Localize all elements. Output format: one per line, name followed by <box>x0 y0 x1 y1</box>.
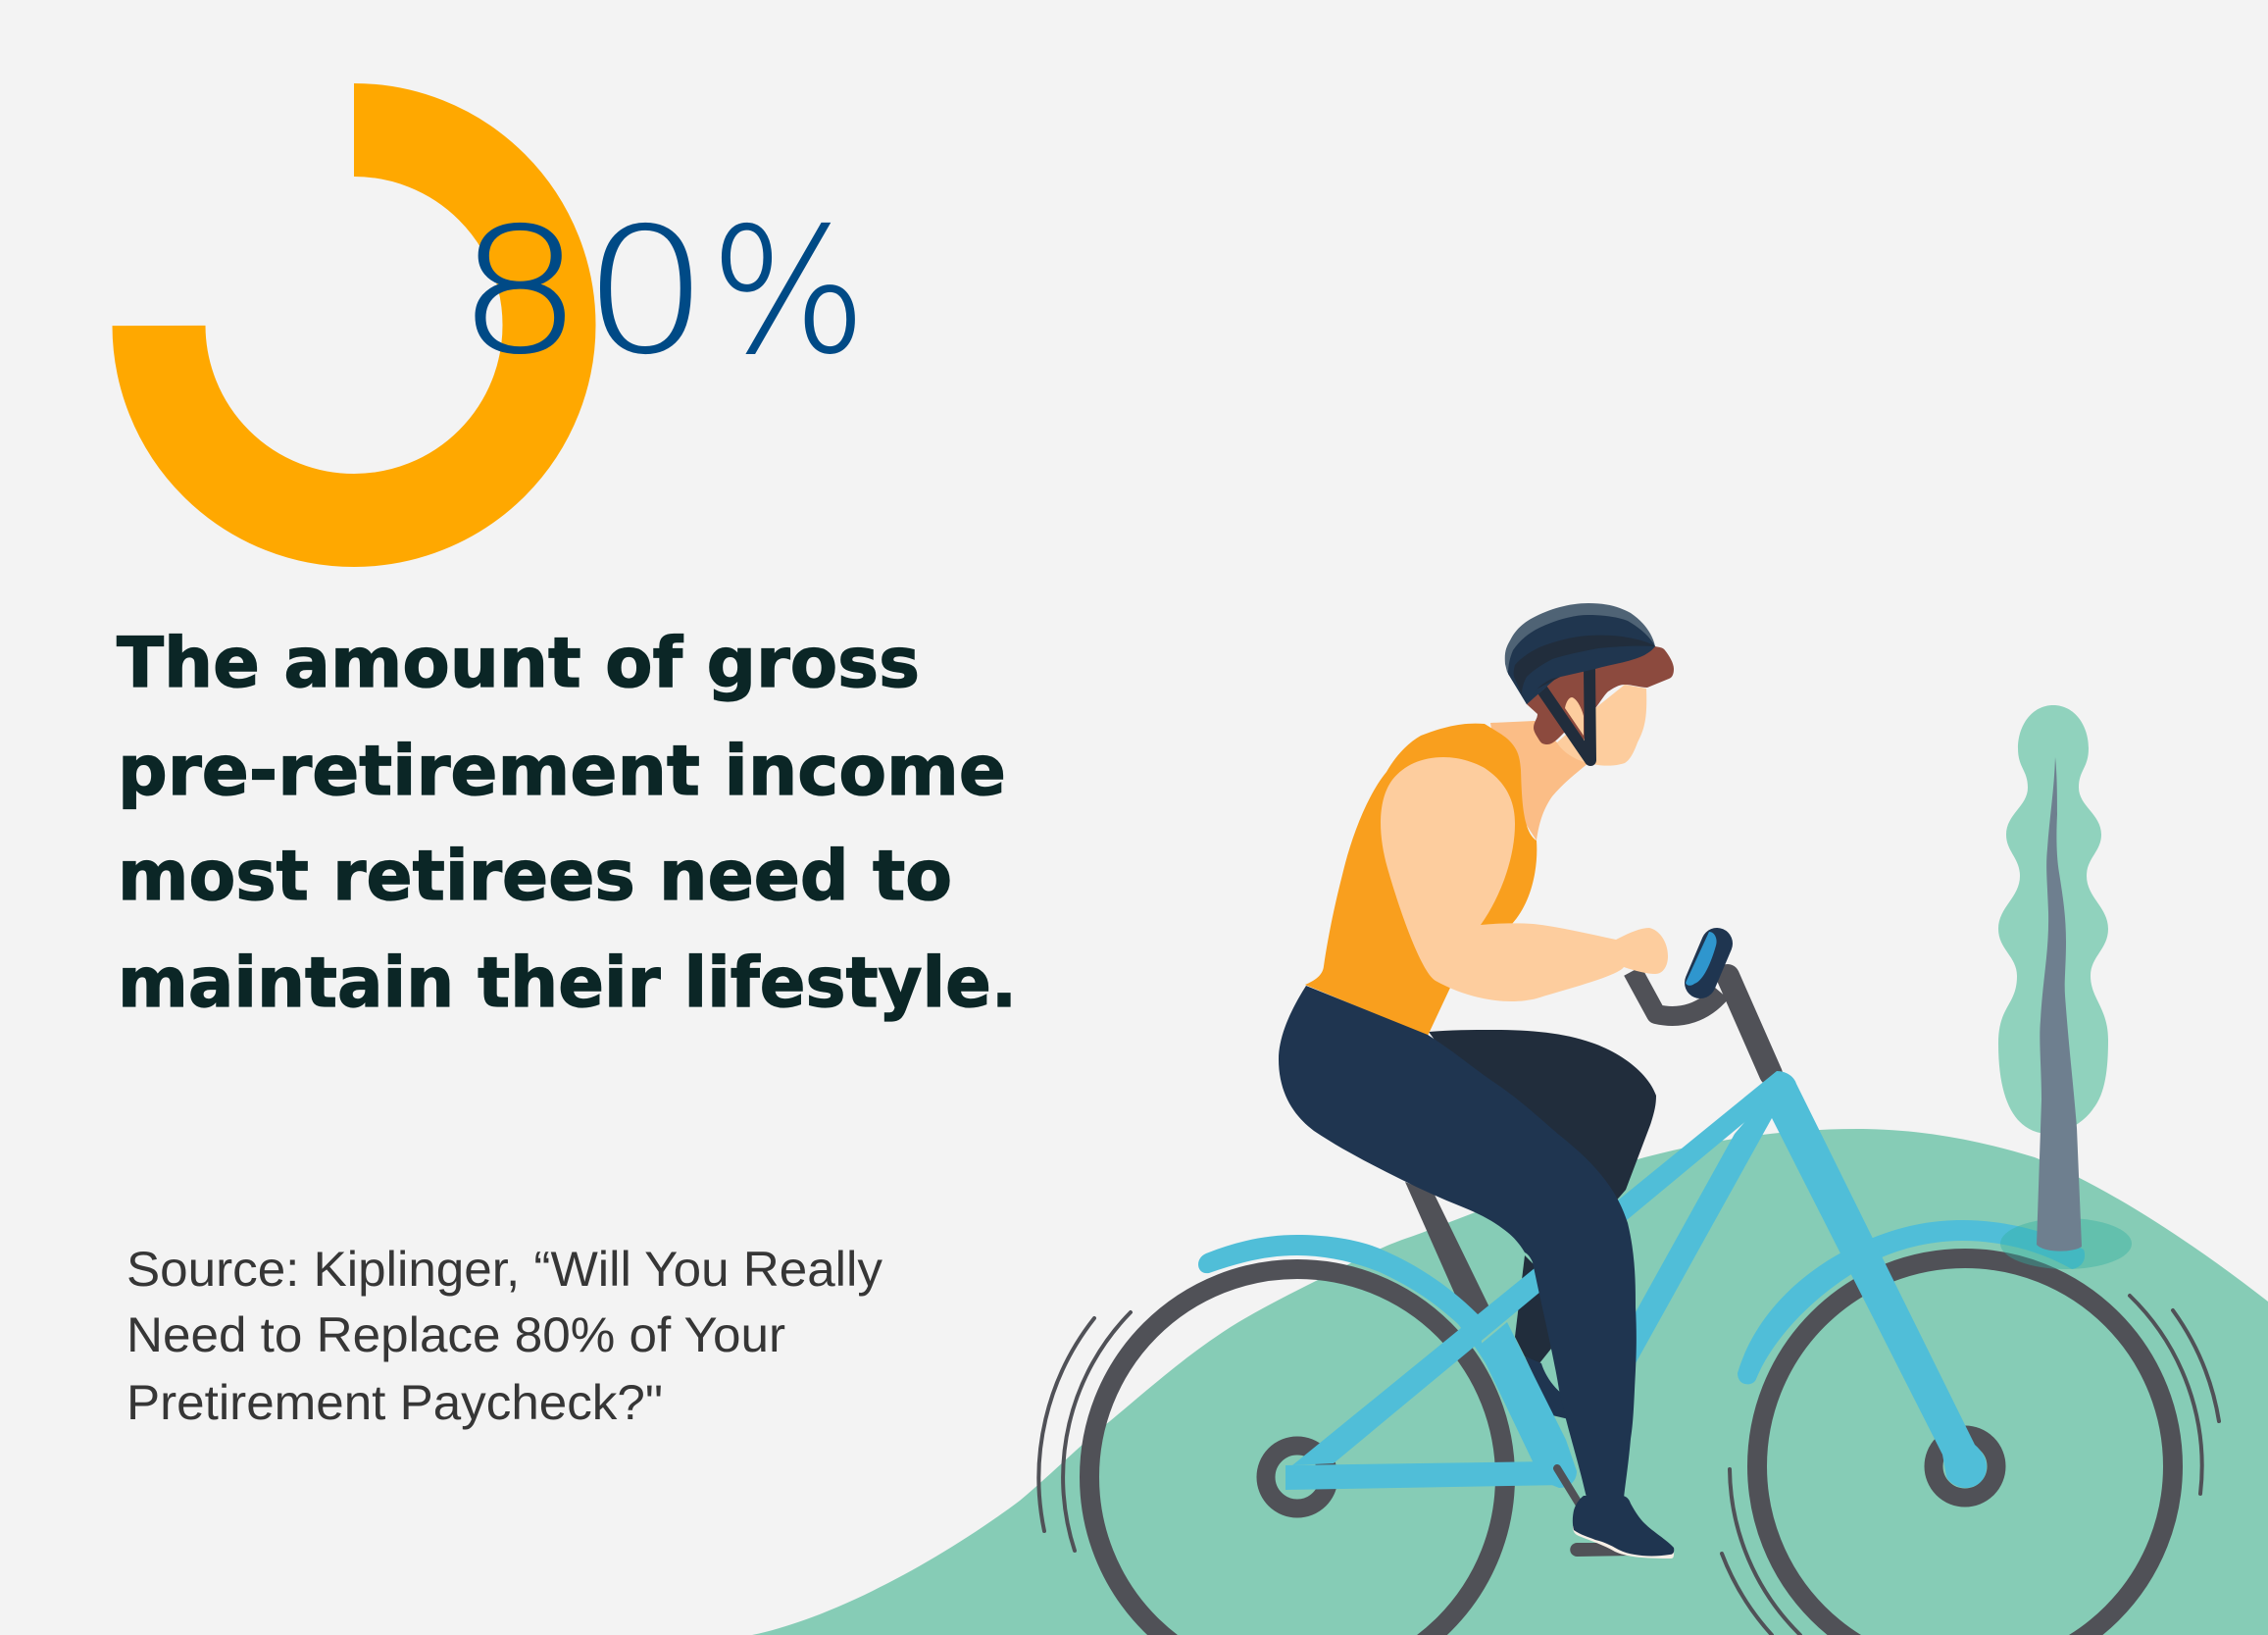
seat post <box>1405 1182 1490 1319</box>
source citation <box>126 1242 882 1430</box>
source citation: Source: Kiplinger, “Will You Really <box>126 1242 882 1297</box>
ear <box>1565 697 1584 736</box>
motion lines <box>1038 1296 2219 1635</box>
calf shadow piece <box>1525 1356 1569 1419</box>
rear wheel <box>1089 1269 1505 1635</box>
handlebar grip <box>1686 932 1717 986</box>
arm <box>1381 757 1668 1001</box>
source citation: Pretirement Paycheck?" <box>126 1375 663 1430</box>
heading text: The amount of gross <box>117 623 920 703</box>
shoe sole <box>1573 1526 1674 1558</box>
bike frame <box>1198 1071 2085 1490</box>
source citation: Need to Replace 80% of Your <box>126 1307 785 1362</box>
main leg <box>1279 986 1637 1498</box>
handlebar <box>1633 971 1771 1074</box>
heading text: pre-retirement income <box>118 731 1006 811</box>
big number 80%: 80 <box>457 191 709 392</box>
neck <box>1490 721 1588 841</box>
far thigh <box>1429 1030 1656 1204</box>
head and face <box>1557 685 1646 766</box>
shoe <box>1573 1496 1674 1556</box>
big number 80% <box>457 191 867 392</box>
heading text <box>117 623 1017 1023</box>
hair <box>1527 646 1674 744</box>
crank arm <box>1557 1468 1581 1507</box>
illustration: tree canopy <box>1998 705 2108 1134</box>
heading text: most retirees need to <box>118 836 952 916</box>
big number 80%: % <box>710 191 867 392</box>
pedal <box>1570 1543 1633 1557</box>
helmet straps <box>1541 669 1590 760</box>
helmet <box>1505 603 1655 704</box>
heading text: maintain their lifestyle. <box>118 943 1017 1023</box>
cyclist <box>1279 603 1674 1558</box>
tree trunk <box>2037 757 2082 1252</box>
illustration: hill <box>752 1129 2268 1635</box>
far lower leg <box>1515 1255 1551 1363</box>
tree shadow <box>2000 1218 2132 1269</box>
front wheel <box>1757 1258 2173 1635</box>
donut chart: 80% ring <box>159 129 549 520</box>
torso tank top <box>1305 724 1537 1036</box>
